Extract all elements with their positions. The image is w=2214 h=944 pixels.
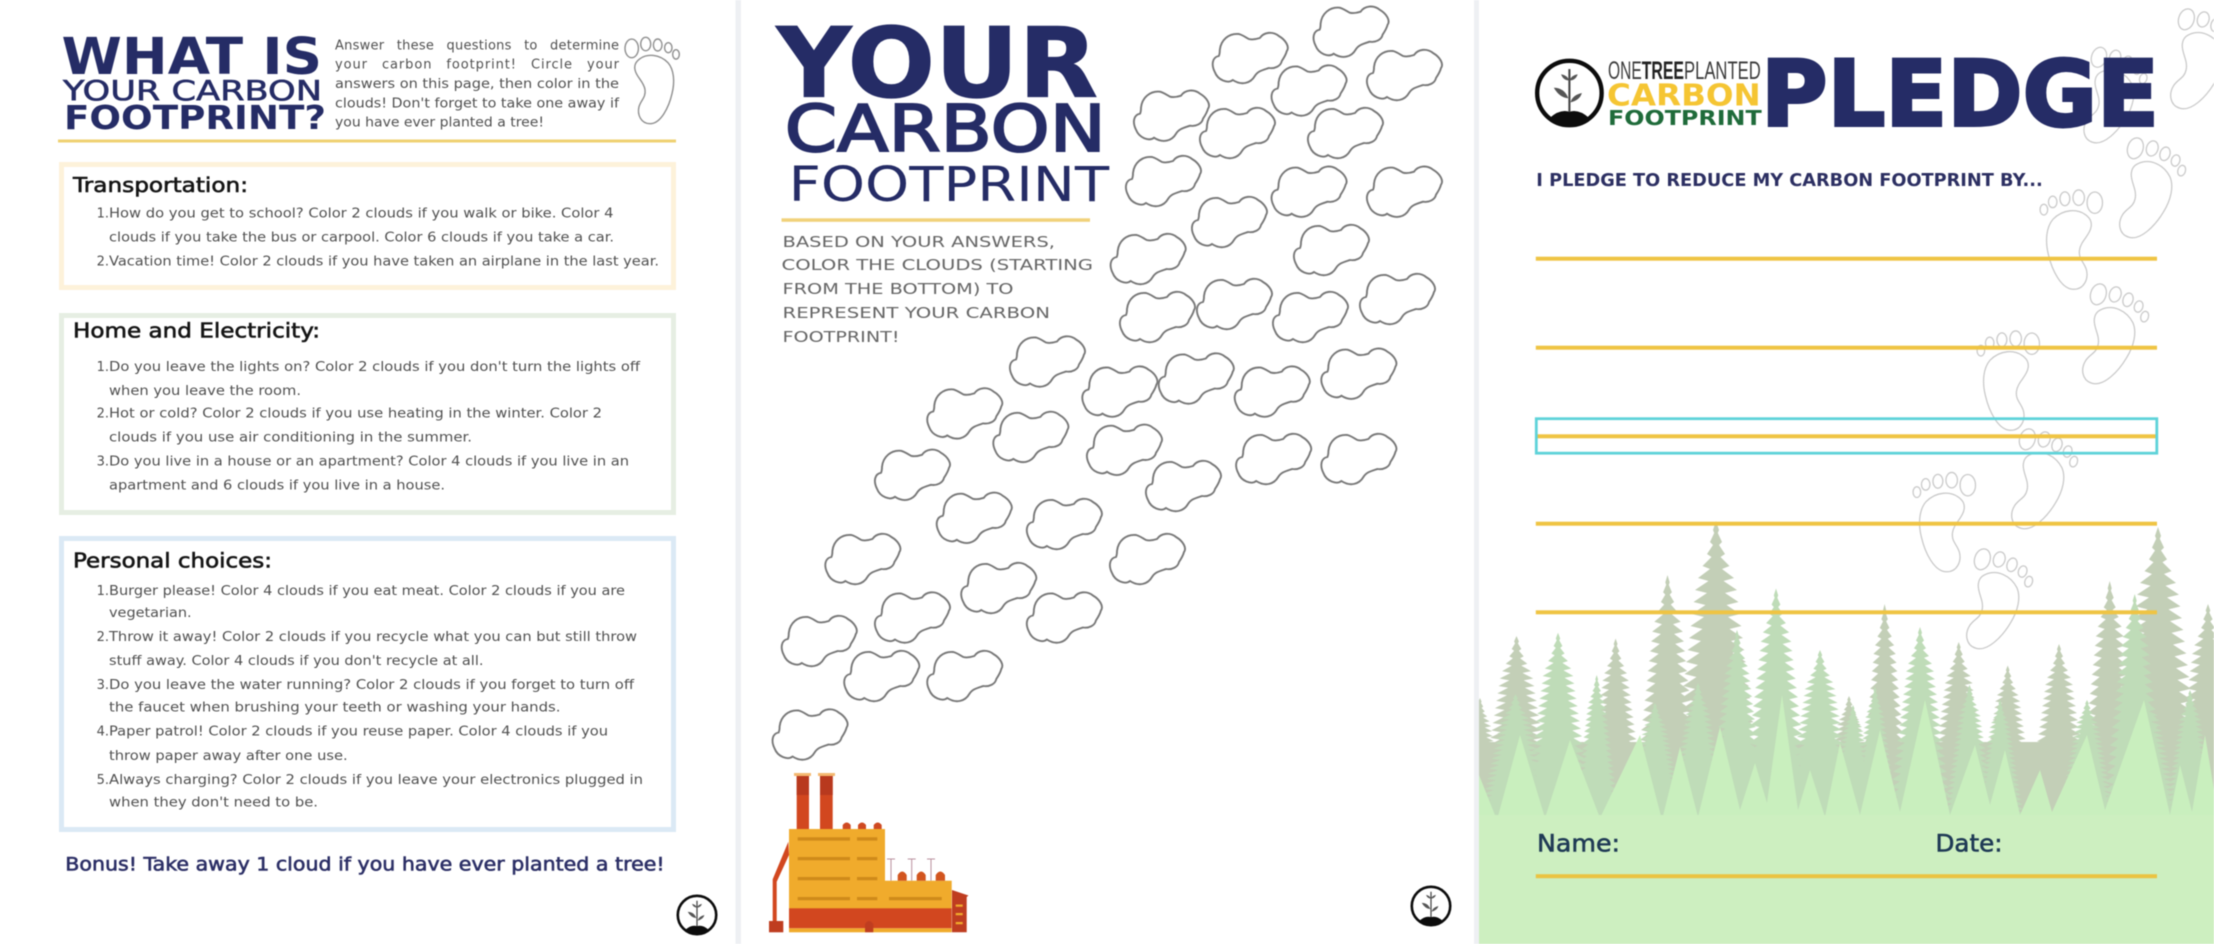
question 1: Burger please! Color 4 clouds if you eat meat. Color 2 clouds if you are [109,584,625,599]
panel: transportation [62,164,674,288]
icon: tree logo [1537,61,1602,125]
instructions: FOOTPRINT! [782,328,900,346]
question 1 [97,360,641,399]
question 2 [97,630,637,669]
footprints trail [1913,5,2214,659]
question 3: Do you leave the water running? Color 2 clouds if you forget to turn off [109,678,635,693]
question 2 [97,406,602,446]
question 3: 3. [97,678,109,693]
question 2: clouds if you use air conditioning in the summer. [109,431,472,446]
icon: factory [769,773,968,932]
logo: one tree planted carbon footprint: FOOTPRINT [1608,106,1762,130]
title: your carbon footprint: CARBON [785,92,1106,167]
intro paragraph: answers on this page, then color in the [335,77,619,92]
icon: tree logo [1412,887,1450,925]
icon: tree logo [678,896,716,934]
title: your carbon footprint: YOUR [776,8,1098,120]
logo: one tree planted carbon footprint: CARBON [1607,79,1761,114]
instructions: BASED ON YOUR ANSWERS, [782,233,1055,251]
instructions [782,233,1093,346]
question 3 [97,678,635,716]
clouds to colour [773,6,1442,760]
title: what is your carbon footprint [62,27,326,137]
heading: personal choices: Personal choices: [73,549,272,573]
question 2: Throw it away! Color 2 clouds if you recycle what you can but still throw [108,630,637,645]
question 4: Paper patrol! Color 2 clouds if you reuse paper. Color 4 clouds if you [109,725,608,740]
question 2: Vacation time! Color 2 clouds if you have taken an airplane in the last year. [109,255,659,270]
signature fields: Name: [1537,830,1620,858]
question 1 [97,584,625,621]
intro paragraph [335,38,620,131]
heading: transportation: Transportation: [72,173,248,197]
question 2: Hot or cold? Color 2 clouds if you use heating in the winter. Color 2 [109,406,602,421]
question 3: the faucet when brushing your teeth or washing your hands. [109,701,560,716]
question 2: 2. [97,255,109,270]
panel: pledge [1454,5,2214,944]
intro paragraph: your carbon footprint! Circle your [335,58,620,73]
question 2: stuff away. Color 4 clouds if you don't recycle at all. [109,654,484,669]
question 5: Always charging? Color 2 clouds if you leave your electronics plugged in [109,773,643,788]
grey tree layer [1478,525,2214,813]
instructions: COLOR THE CLOUDS (STARTING [782,256,1093,274]
question 5 [97,773,643,811]
panel: home and electricity [62,316,674,512]
question 3: 3. [97,455,109,470]
instructions: REPRESENT YOUR CARBON [782,304,1050,322]
question 1: 1. [97,206,109,221]
intro paragraph: Answer these questions to determine [335,38,619,53]
question 1: 1. [97,360,109,375]
intro paragraph: you have ever planted a tree! [335,116,544,131]
cyan highlight box [1536,419,2157,453]
question 4: 4. [97,725,109,740]
panel: personal choices [62,538,674,830]
title: what is your carbon footprint: YOUR CARBON [62,76,322,107]
brand name: TREE [1642,57,1684,85]
title: your carbon footprint [776,8,1110,213]
chimneys [794,773,835,829]
writing lines [1536,257,2157,614]
question 1: How do you get to school? Color 2 clouds if you walk or bike. Color 4 [109,206,614,221]
question 2: 2. [97,630,109,645]
question 1: when you leave the room. [109,384,301,399]
title: what is your carbon footprint: FOOTPRINT? [64,98,326,137]
title: what is your carbon footprint: WHAT IS [62,27,322,86]
light green foreground [1478,698,2214,816]
question 1: vegetarian. [109,606,192,621]
question 1: clouds if you take the bus or carpool. Color 6 clouds if you take a car. [109,231,614,246]
bonus line: Bonus! Take away 1 cloud if you have ever planted a tree! [65,854,665,876]
title: pledge: PLEDGE [1761,43,2159,148]
question 5: 5. [97,773,109,788]
icon: footprint [625,37,679,124]
signature fields [1536,830,2157,878]
pledge statement: I PLEDGE TO REDUCE MY CARBON FOOTPRINT BY... [1536,170,2043,191]
question 2: 2. [97,406,109,421]
signature fields: Date: [1936,830,2002,858]
heading: home and electricity: Home and Electricity: [73,319,320,343]
panel: your carbon footprint clouds [769,6,1450,932]
question 3 [97,455,629,493]
instructions: FROM THE BOTTOM) TO [782,280,1014,298]
question 3: Do you live in a house or an apartment? Color 4 clouds if you live in an [109,455,629,470]
brand name [1608,57,1761,85]
intro paragraph: clouds! Don't forget to take one away if [335,96,619,111]
title: your carbon footprint: FOOTPRINT [789,157,1110,213]
question 1: 1. [97,584,109,599]
brand name: PLANTED [1684,57,1761,85]
question 1: Do you leave the lights on? Color 2 clouds if you don't turn the lights off [109,360,641,375]
question 1 [97,206,614,246]
mid green tree layer [1478,588,2214,821]
forest background [1454,521,2214,944]
panel: what is your carbon footprint [58,27,716,934]
brand name: ONE [1608,57,1642,85]
question 5: when they don't need to be. [109,796,318,811]
question 3: apartment and 6 clouds if you live in a house. [109,478,445,493]
question 4 [97,725,608,764]
question 4: throw paper away after one use. [109,749,348,764]
logo: one tree planted carbon footprint [1537,57,1762,130]
